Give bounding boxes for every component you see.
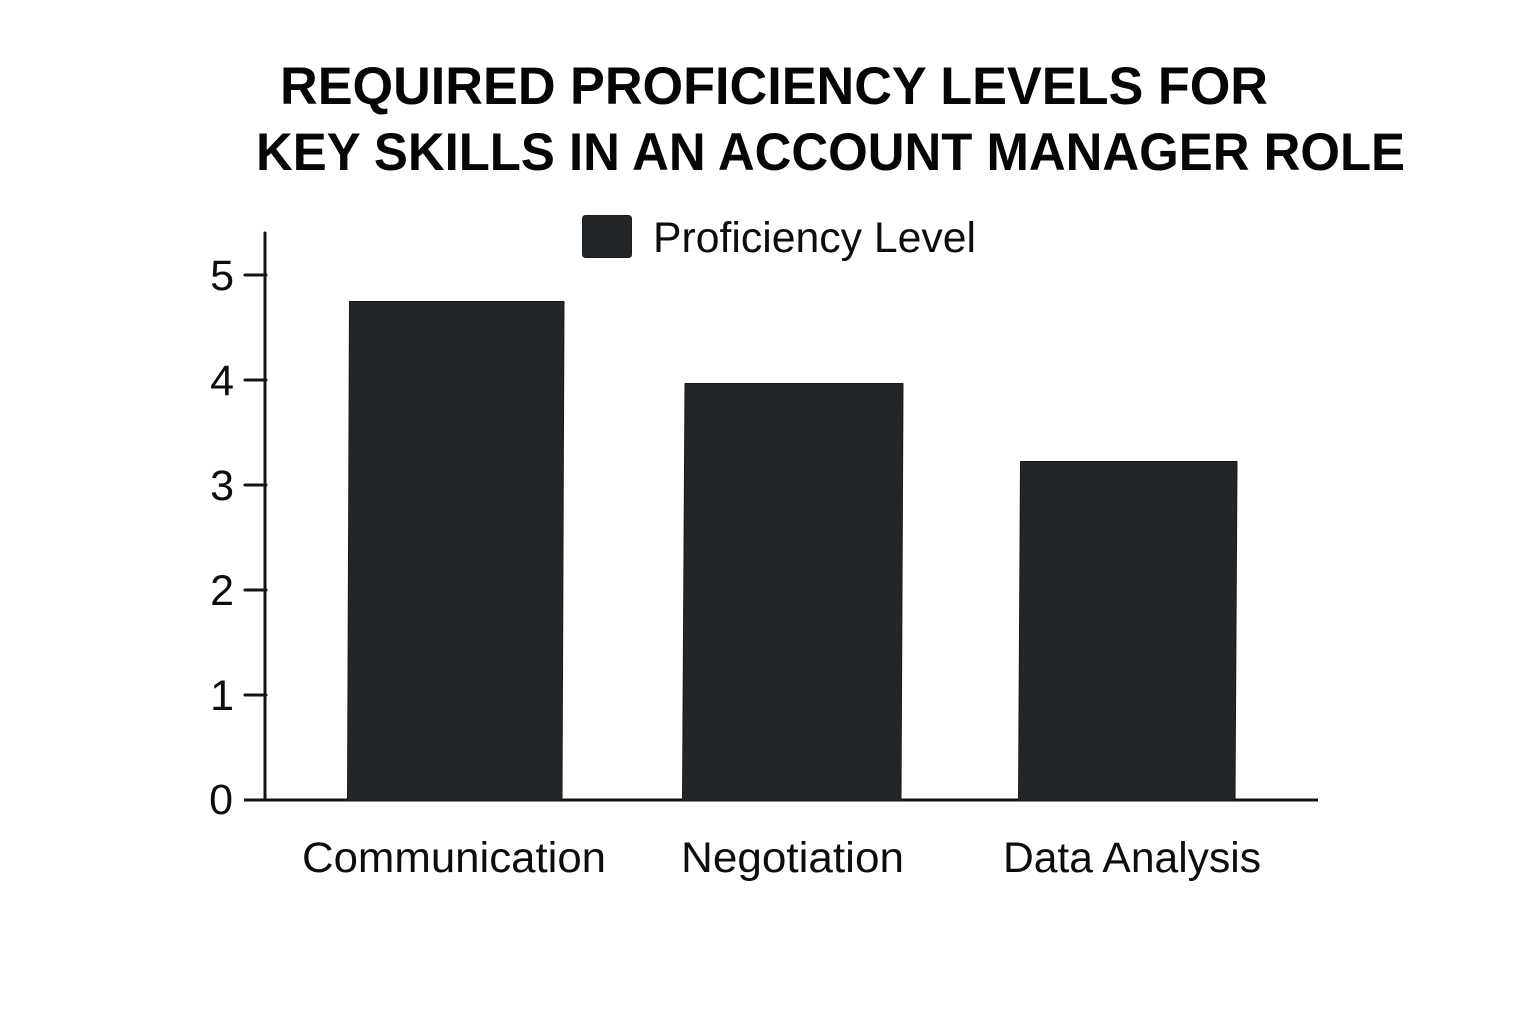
bar: Negotiation	[682, 384, 903, 800]
title: REQUIRED PROFICIENCY LEVELS FOR	[280, 57, 1268, 116]
category labels	[302, 834, 1261, 882]
title	[256, 57, 1405, 182]
category labels: Negotiation	[681, 834, 904, 882]
y axis: 1	[210, 672, 234, 720]
y axis: 3	[210, 462, 234, 510]
x axis	[244, 798, 1318, 802]
category labels: Data Analysis	[1003, 834, 1261, 882]
title: KEY SKILLS IN AN ACCOUNT MANAGER ROLE	[256, 123, 1405, 182]
y axis	[209, 233, 266, 824]
y axis: 4	[210, 357, 234, 405]
y axis: 5	[210, 252, 234, 300]
bar: Communication	[348, 302, 564, 800]
category labels: Communication	[302, 834, 606, 882]
y axis: 2	[210, 567, 234, 615]
bar: Data Analysis	[1018, 462, 1237, 800]
y axis: 0	[209, 776, 233, 824]
legend: Proficiency Level	[653, 214, 976, 262]
